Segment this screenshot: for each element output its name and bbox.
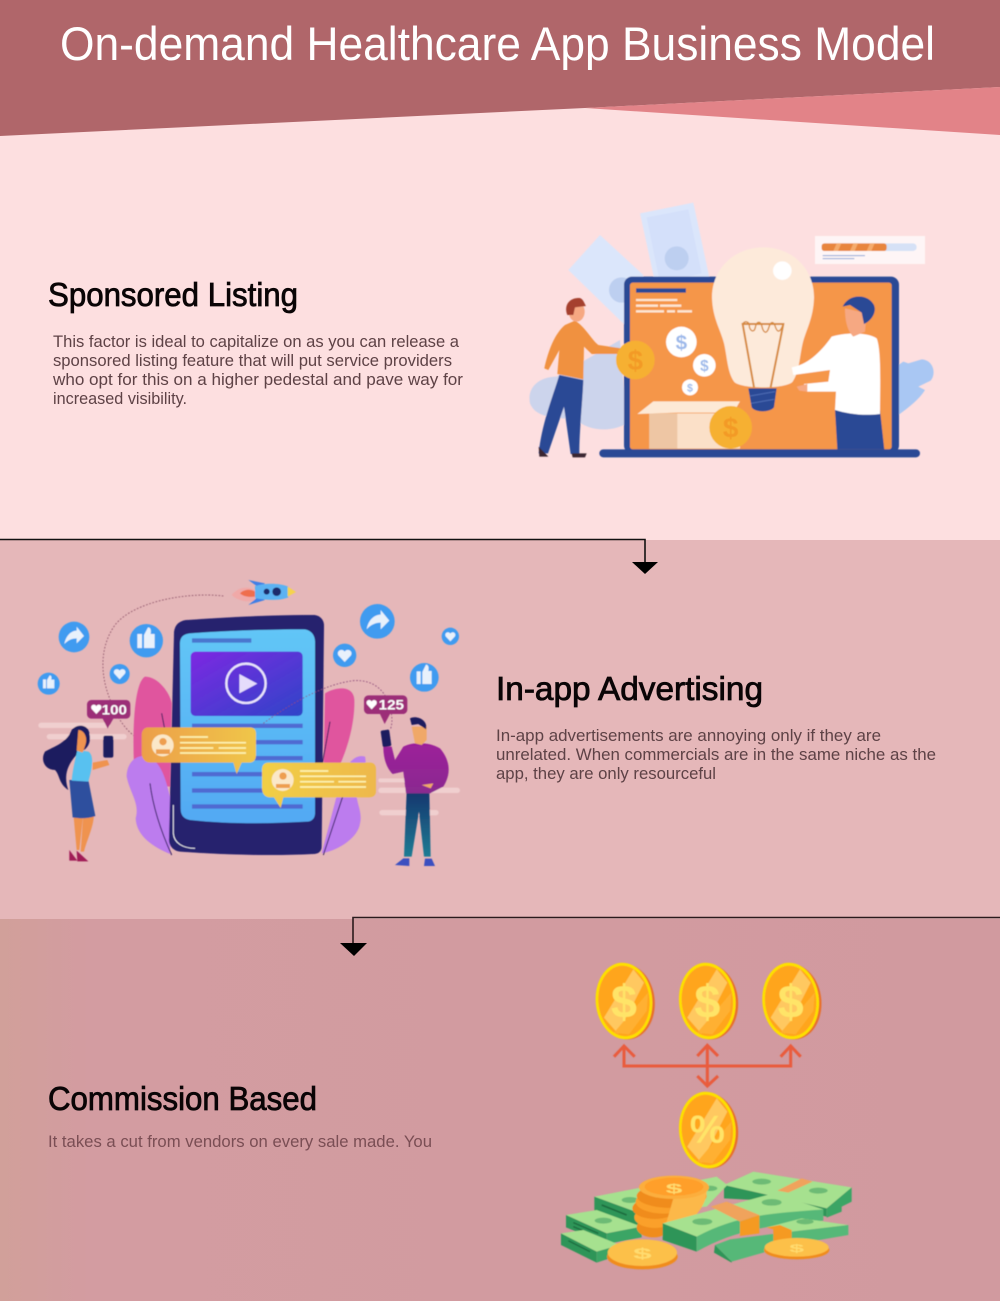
coin stack: $ [666, 1181, 683, 1196]
icon: dollar coins on screen: $ [687, 382, 693, 394]
icon: dollar coin 3: $ [778, 976, 804, 1028]
text block: sponsored listing description: sponsored listing feature that will put service providers [53, 351, 452, 370]
person: man with phone [381, 717, 449, 866]
text block: commission based description: It takes a cut from vendors on every sale made. You [48, 1132, 432, 1151]
cash bundle back right [724, 1172, 852, 1218]
panel: in-app advertising background [0, 540, 1000, 919]
coin flat right [764, 1238, 829, 1259]
panel: commission based background [0, 919, 1000, 1301]
coin flat right: $ [789, 1242, 805, 1255]
cash bundle front right [714, 1218, 848, 1263]
badge: 125 likes [364, 695, 407, 724]
cash bundle front [663, 1193, 823, 1252]
dotted trail right [263, 681, 392, 730]
text block: sponsored listing description: increased visibility. [53, 389, 187, 408]
banner accent wedge [585, 87, 1000, 135]
icon: dollar coin 2: $ [694, 976, 720, 1028]
illustration: laptop, light bulb and two people [529, 203, 934, 457]
icon: share, right [360, 604, 395, 639]
icon: gold coin in box: $ [723, 412, 739, 443]
icon: dollar coin 3 [759, 960, 825, 1042]
person: woman with phone [43, 726, 113, 861]
coin flat left [607, 1239, 678, 1269]
connector arrow: section 2 to 3 [340, 918, 1000, 956]
banner shape [0, 0, 1000, 136]
arrows linking coins [614, 1045, 801, 1086]
icon: percent coin [676, 1089, 741, 1171]
heading: sponsored listing: Sponsored Listing [48, 276, 298, 313]
icon: share, left [59, 622, 89, 652]
icon: banknotes [568, 203, 709, 330]
header banner [0, 0, 1000, 136]
cash bundle left lower [561, 1230, 620, 1263]
tablet [169, 615, 324, 855]
illustration: phone with social icons [38, 580, 460, 866]
panel: sponsored listing text [48, 276, 463, 408]
text block: in-app advertising description: unrelated. When commercials are in the same niche as the [496, 745, 936, 764]
icon: light bulb [712, 247, 814, 411]
leaves [127, 677, 366, 855]
coin stack [632, 1176, 709, 1237]
badge: 100 likes [87, 700, 130, 729]
person: left, holding coin [539, 298, 655, 457]
icon: background leaves [529, 340, 934, 429]
person: right, touching bulb [792, 296, 884, 449]
progress bar card [815, 236, 925, 264]
panel: in-app advertising text [496, 670, 936, 783]
badge: 100 likes: 100 [102, 701, 127, 717]
comment bubble left [142, 727, 256, 774]
icon: dollar coin 2 [676, 960, 741, 1042]
coin flat left: $ [633, 1246, 652, 1262]
icon: open box [637, 401, 740, 449]
icon: dollar coins on screen [666, 327, 716, 395]
heading: in-app advertising: In-app Advertising [496, 670, 763, 707]
laptop [599, 277, 920, 457]
connector arrow: section 1 to 2 [0, 540, 658, 574]
rocket and dotted trail [103, 580, 296, 742]
icon: heart, mid-left [110, 664, 130, 684]
icon: like, large [130, 624, 163, 657]
icon: like, right [410, 663, 439, 692]
decorative stripes [38, 723, 460, 815]
cash bundle back [594, 1177, 727, 1227]
icon: heart, right small [442, 628, 459, 645]
heading: commission based: Commission Based [48, 1080, 317, 1117]
badge: 125 likes: 125 [379, 697, 404, 713]
icon: dollar coin 1: $ [611, 976, 637, 1028]
icon: heart, right [333, 644, 356, 667]
illustration: coins, arrows and cash [561, 960, 852, 1269]
text block: in-app advertising description: app, they are only resourceful [496, 764, 716, 783]
panel: commission based text [48, 1080, 432, 1151]
comment bubble right [262, 763, 376, 808]
text block: sponsored listing description: who opt for this on a higher pedestal and pave way for [52, 370, 463, 389]
icon: dollar coin 1 [592, 960, 658, 1042]
text block: in-app advertising description: In-app advertisements are annoying only if they are [496, 726, 881, 745]
icon: gold coin in box [709, 406, 752, 449]
icon: cash and coin pile [561, 1172, 852, 1269]
icon: percent coin: % [690, 1108, 725, 1152]
icon: dollar coins on screen: $ [700, 358, 709, 375]
title: On-demand Healthcare App Business Model [60, 17, 935, 70]
cash bundle left upper [566, 1210, 642, 1244]
person: left, holding coin: $ [628, 345, 643, 376]
icon: like, small [38, 673, 60, 695]
text block: sponsored listing description: This factor is ideal to capitalize on as you can release a [53, 332, 460, 351]
icon: dollar coins on screen: $ [676, 331, 688, 354]
